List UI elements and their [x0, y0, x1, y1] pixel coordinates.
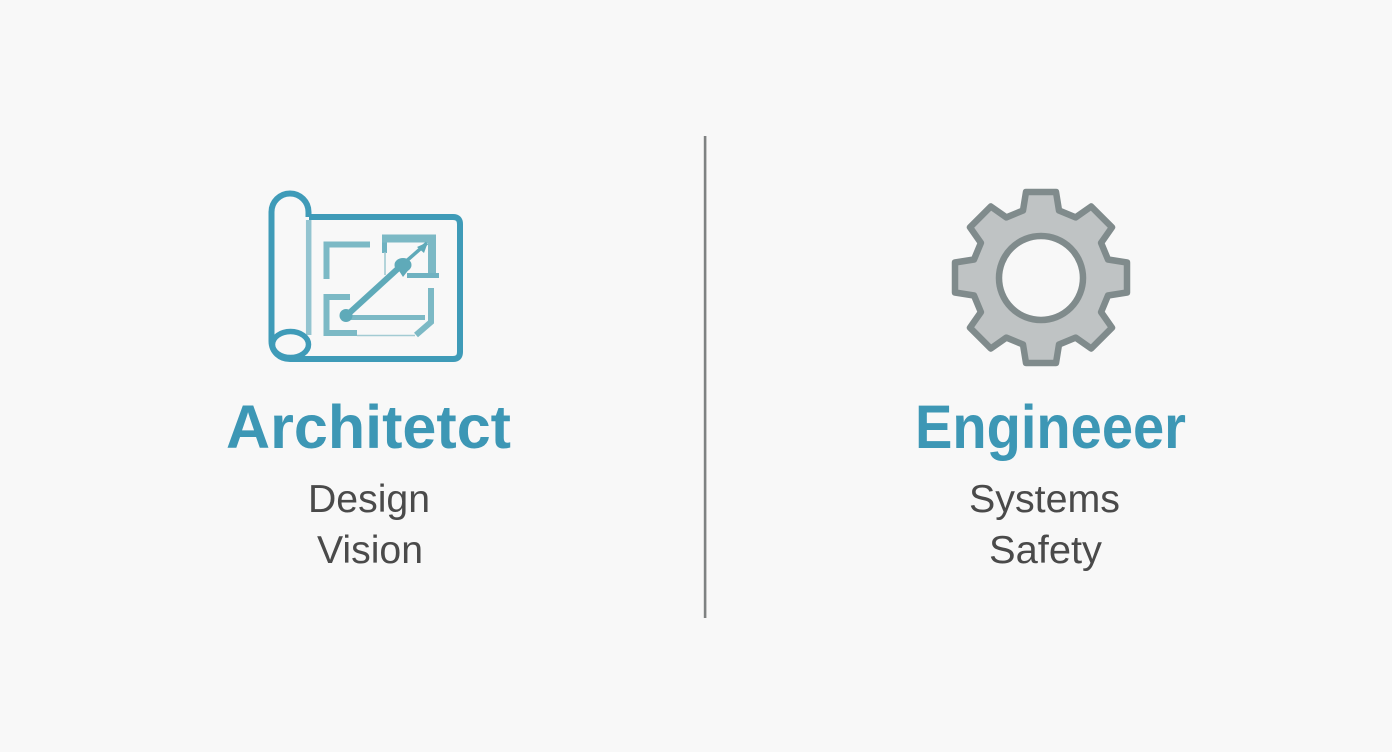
icon: diagonal arrow [340, 242, 428, 322]
panel: architect [226, 194, 511, 572]
icon: blueprint roll [272, 194, 460, 359]
text block: engineer traits [969, 478, 1120, 572]
divider [704, 136, 706, 618]
icon: floor plan lines [326, 237, 439, 336]
icon: gear [955, 192, 1127, 363]
heading: Engineeer: Engineeer [915, 393, 1186, 461]
text block: engineer traits: Safety [989, 529, 1103, 572]
text block: engineer traits: Systems [969, 478, 1120, 521]
text block: architect traits: Vision [317, 529, 423, 572]
text block: architect traits [308, 478, 430, 572]
panel: engineer [915, 192, 1186, 572]
heading: Architetct: Architetct [226, 393, 511, 461]
text block: architect traits: Design [308, 478, 430, 521]
